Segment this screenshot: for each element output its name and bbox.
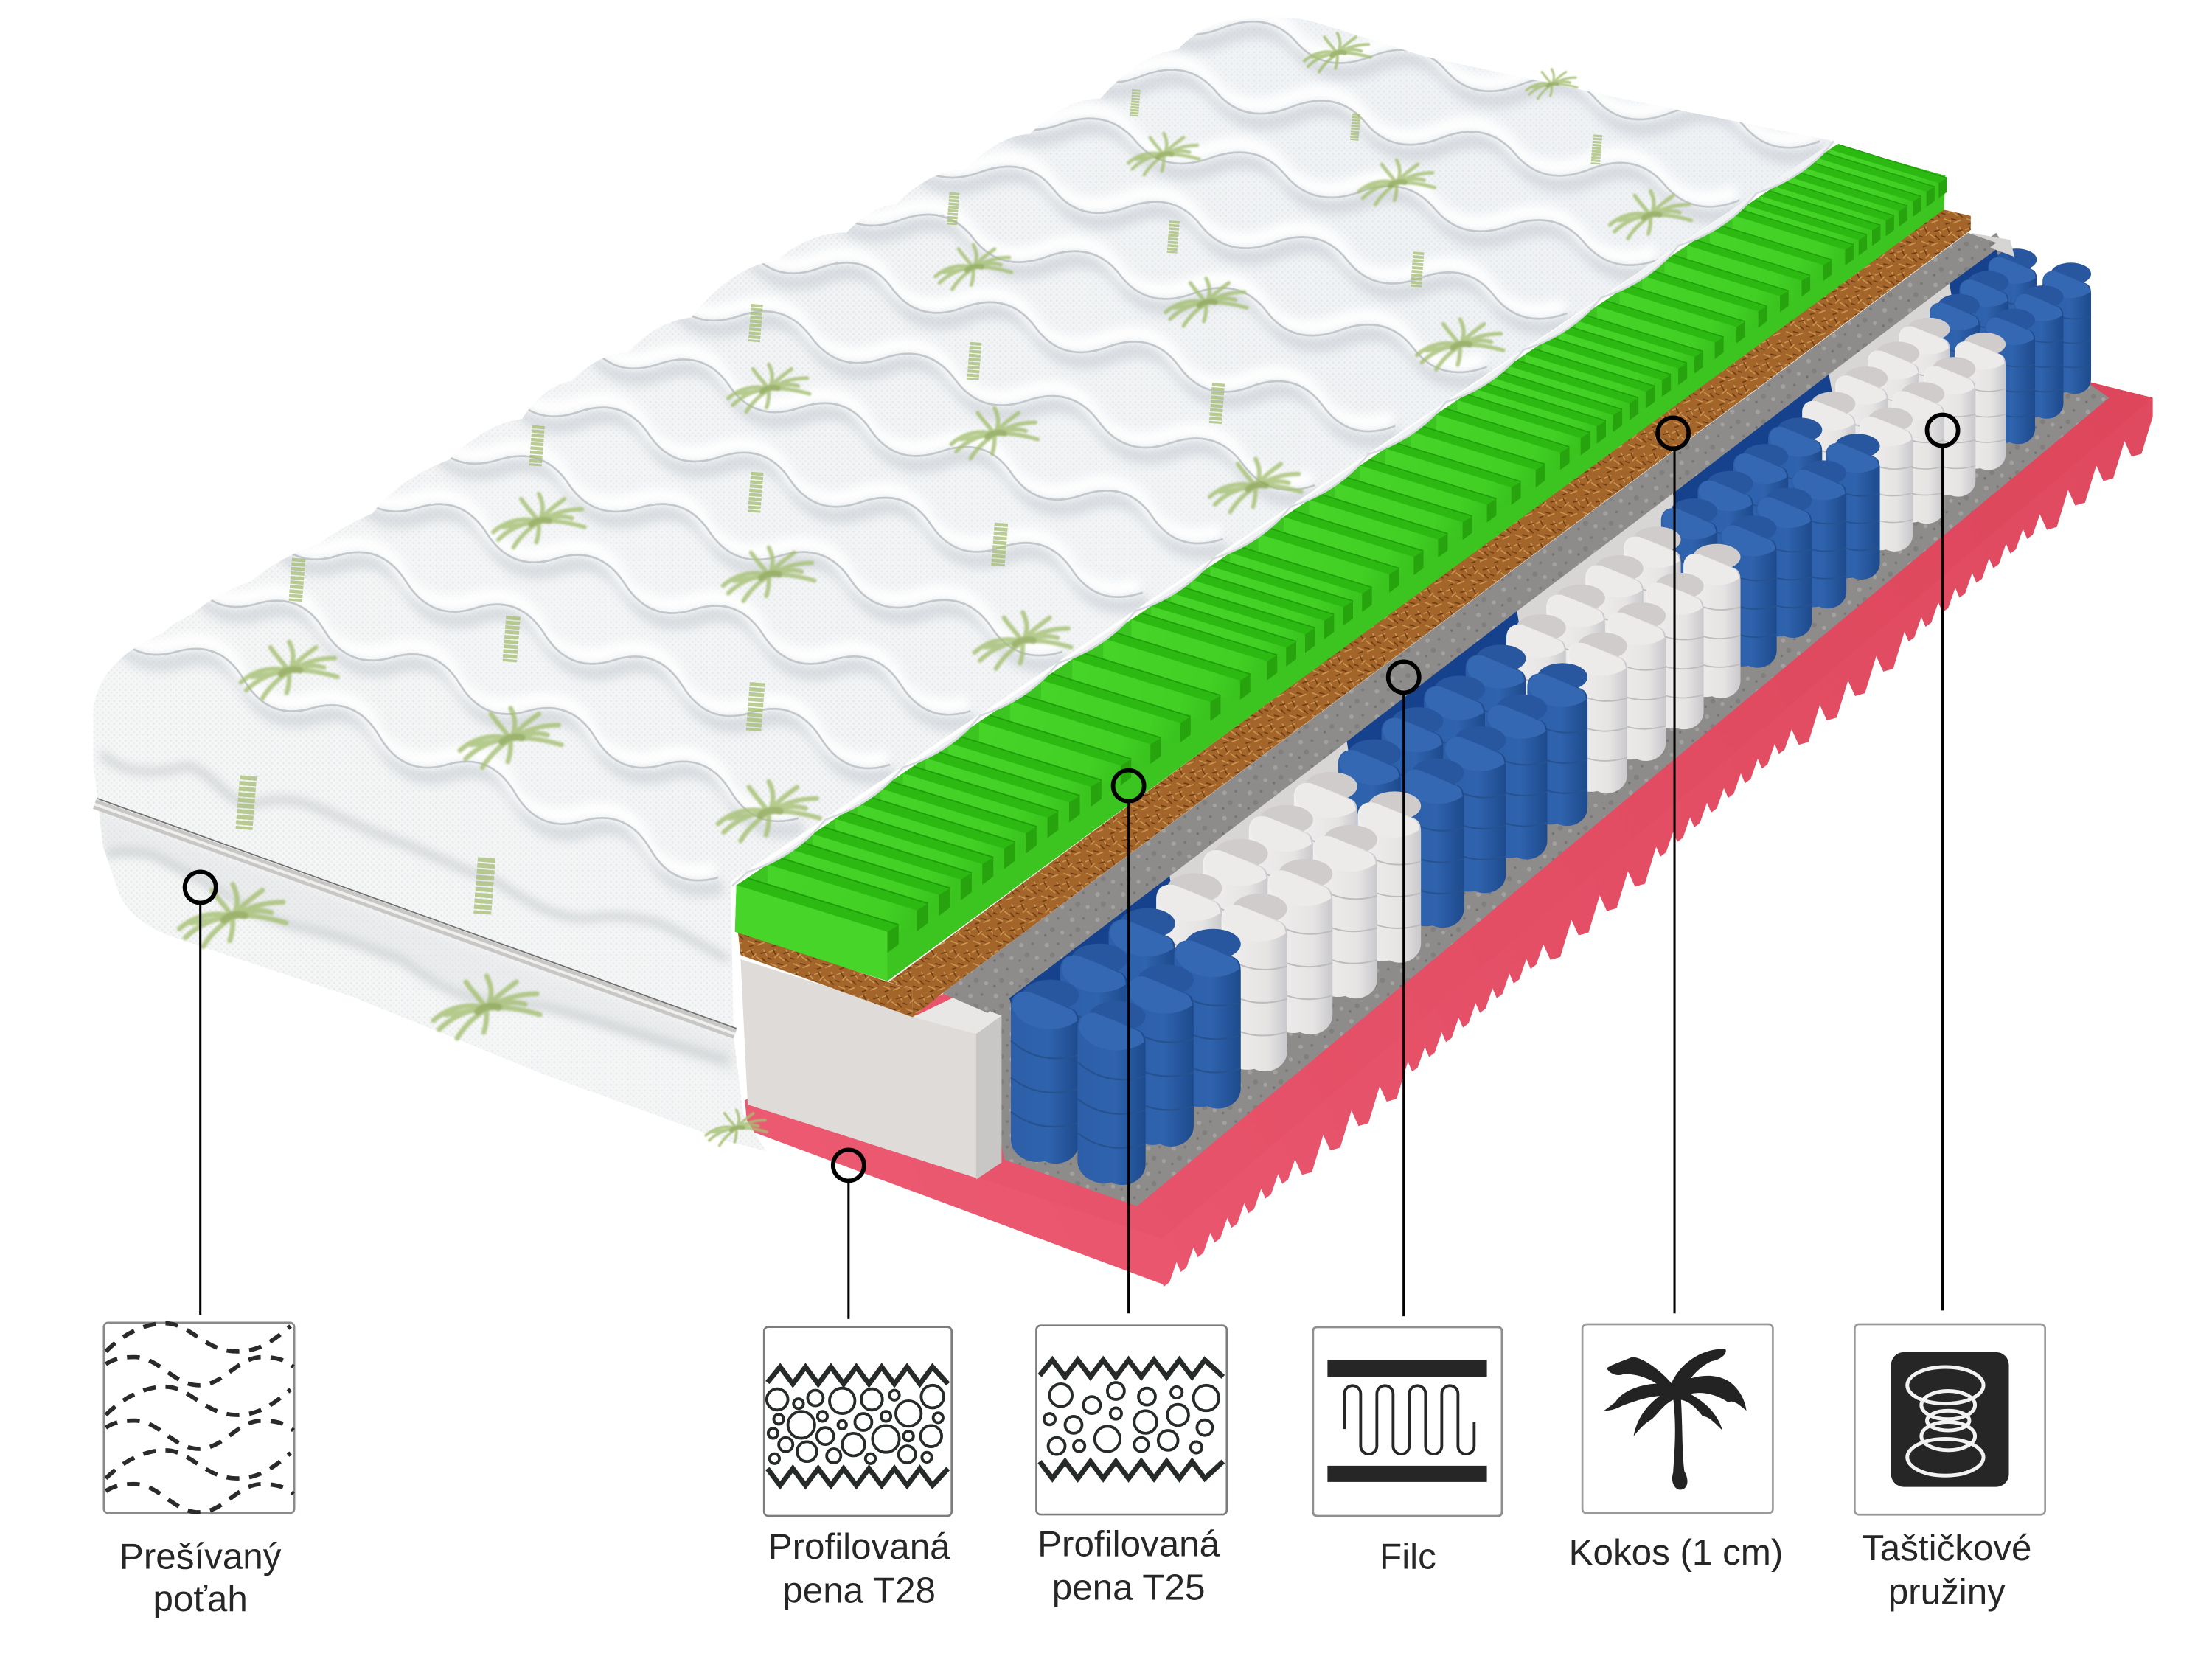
legend: pocket springs: [1854, 1324, 2045, 1612]
icon: coil spring: [1854, 1324, 2045, 1514]
label: Filc: [1380, 1537, 1436, 1577]
label: Taštičkové: [1862, 1528, 2032, 1568]
icon: foam with fewer bubbles: [1036, 1326, 1227, 1514]
panel: felt layer: [942, 233, 1996, 1013]
panel: white foam side block: [740, 233, 2014, 1179]
panel: pocket springs: [1009, 248, 2091, 1185]
legend: felt: [1313, 1327, 1502, 1577]
leader: pocket springs: [1927, 414, 1958, 1310]
panel: quilted cover with palm motifs: [38, 0, 1848, 1171]
label: pena T28: [782, 1570, 936, 1610]
label: Prešívaný: [119, 1537, 282, 1577]
quilting seams: [38, 0, 1848, 1171]
cover body: [93, 17, 1834, 1151]
green ridges: [735, 145, 1947, 981]
legend: foam T25: [1036, 1326, 1227, 1608]
icon: felt: [1313, 1327, 1502, 1516]
panel: pink profiled foam base T28: [745, 381, 2153, 1287]
panel: green profiled foam T25: [735, 145, 1947, 981]
cut edge of cover: scallops: [732, 141, 1834, 886]
panel: coconut layer: [738, 209, 1971, 1017]
icon: palm tree: [1582, 1324, 1773, 1513]
leader: felt: [1388, 661, 1419, 1316]
label: pena T25: [1052, 1568, 1205, 1608]
palm motifs: [179, 33, 1691, 1146]
legend: quilted cover: [104, 1323, 294, 1619]
leader: foam T28: [833, 1150, 864, 1319]
icon: foam with bubbles: [764, 1327, 952, 1516]
leader: foam T25: [1113, 771, 1144, 1313]
leader: coconut: [1658, 417, 1688, 1313]
legend: coconut: [1569, 1324, 1783, 1573]
label: poťah: [153, 1579, 248, 1619]
leader: cover: [185, 872, 216, 1315]
legend: foam T28: [764, 1327, 952, 1610]
label: Profilovaná: [768, 1526, 950, 1567]
label: pružiny: [1888, 1571, 2006, 1612]
label: Profilovaná: [1037, 1523, 1220, 1564]
icon: quilting: [104, 1323, 294, 1513]
green side band: [735, 145, 1945, 981]
panel: felt pad under springs: [973, 233, 2109, 1206]
zip piping: [94, 799, 737, 1034]
label: Kokos (1 cm): [1569, 1532, 1783, 1573]
